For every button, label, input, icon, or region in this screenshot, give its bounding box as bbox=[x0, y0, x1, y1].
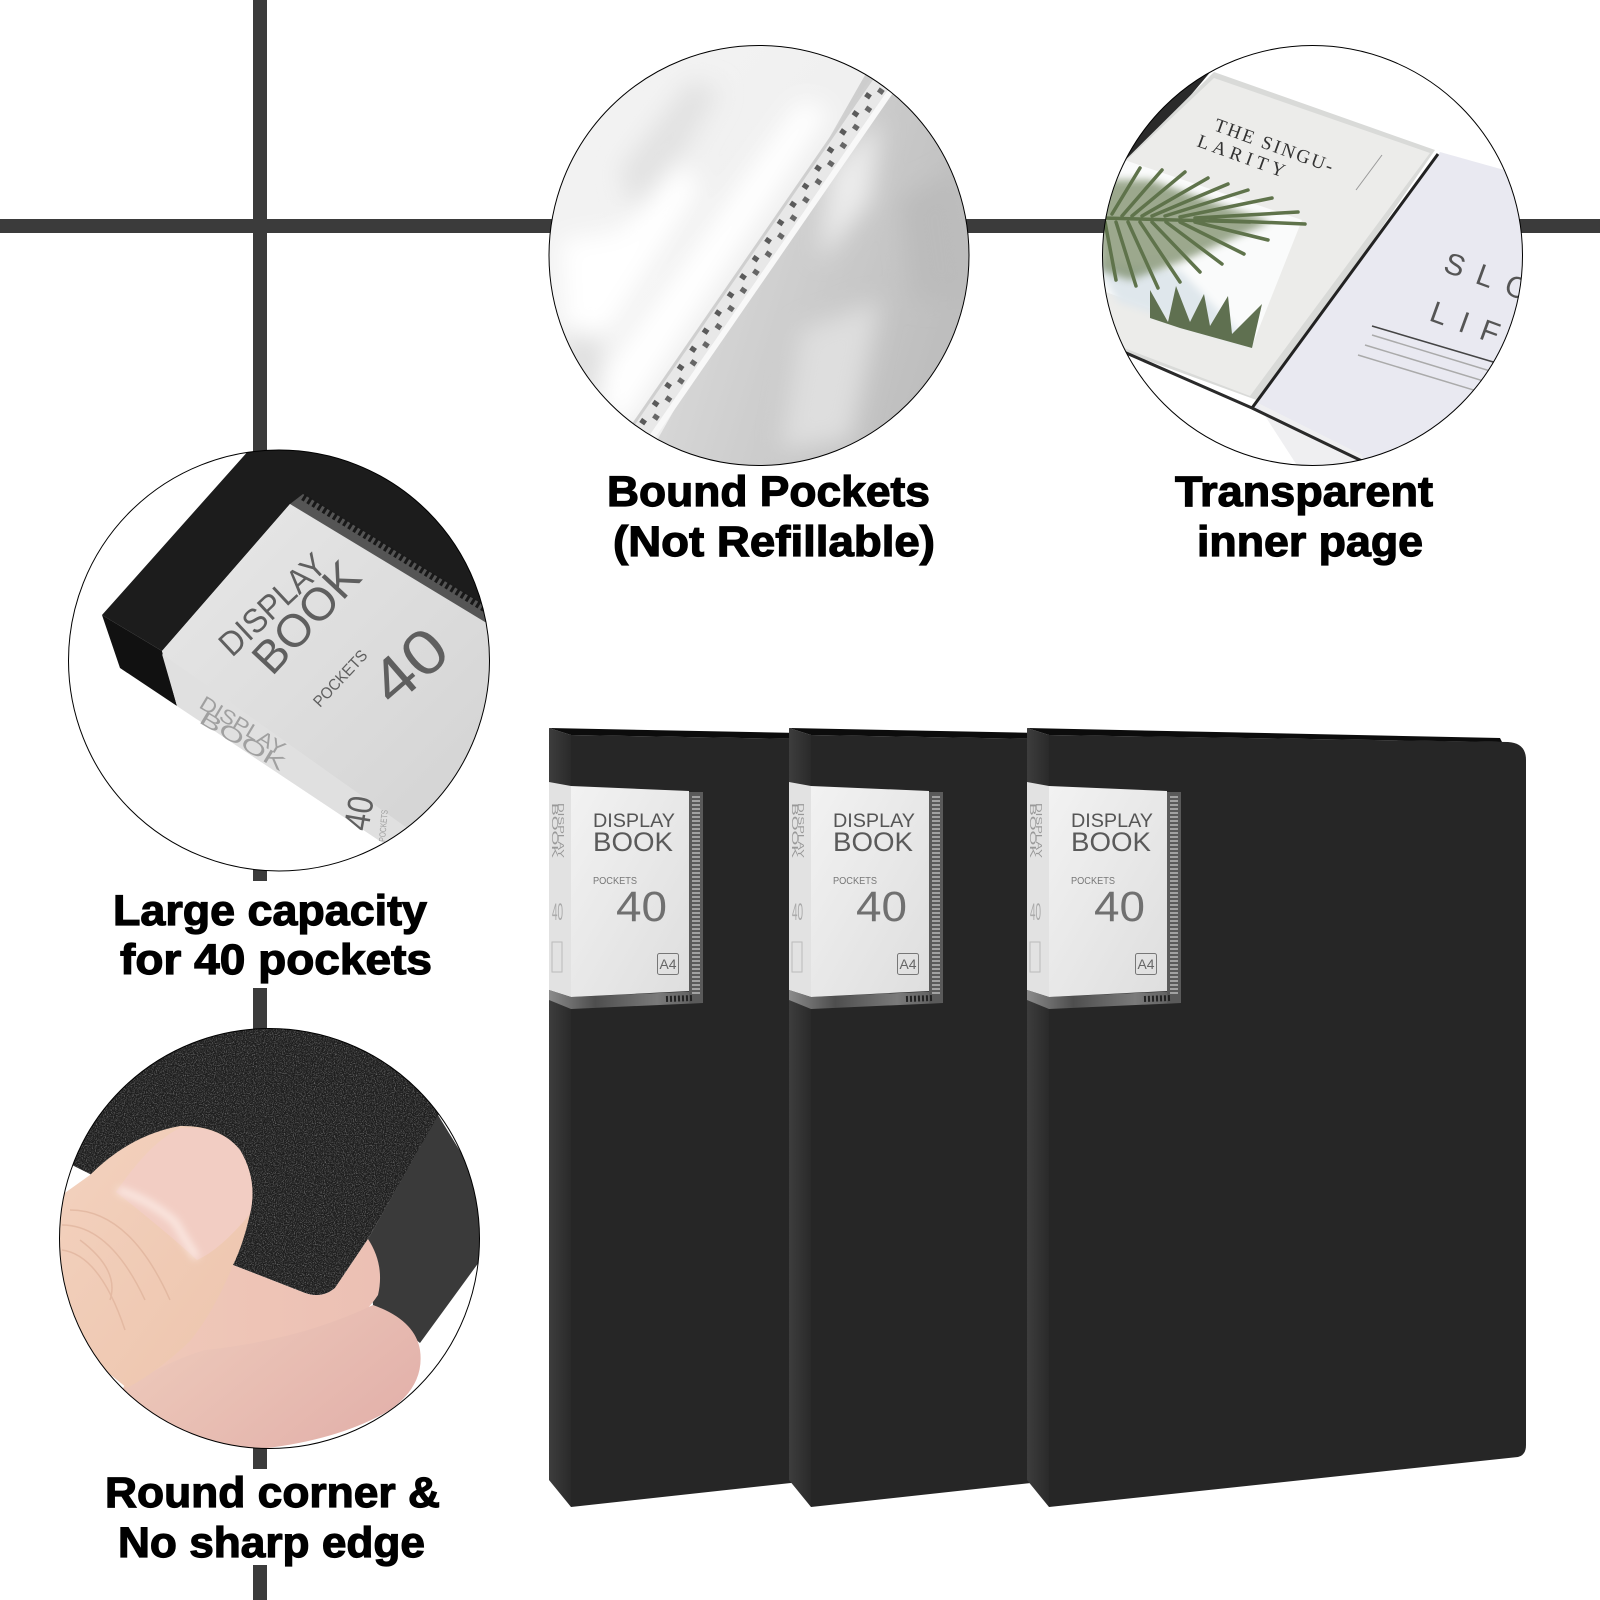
top edge bbox=[549, 728, 800, 739]
caption: bound pockets: Bound Pockets bbox=[607, 468, 930, 516]
product: second display book bbox=[789, 728, 1040, 1507]
photo: open display book with two pages: LIF bbox=[1426, 296, 1517, 356]
cover label: DISPLAY bbox=[833, 811, 915, 832]
caption: transparent inner page: inner page bbox=[1197, 518, 1423, 566]
cover label: 40 bbox=[616, 883, 667, 931]
photo: angled view of display book: POCKETS bbox=[310, 647, 371, 711]
cover label bbox=[549, 782, 703, 1009]
photo: angled view of display book: BOOK bbox=[195, 707, 290, 776]
right page text: SLO bbox=[1440, 247, 1547, 312]
caption: bound pockets bbox=[607, 468, 935, 566]
cover label: BOOK bbox=[593, 827, 673, 857]
photo: open display book with two pages: LARITY bbox=[1194, 131, 1288, 182]
cover label: BOOK bbox=[1071, 827, 1151, 857]
cover label: 40 bbox=[792, 899, 803, 926]
cover label: BOOK bbox=[1028, 803, 1037, 860]
circle outline bbox=[60, 1028, 480, 1448]
cover text: DISPLAY bbox=[212, 546, 334, 664]
cover label: DISPLAY bbox=[1071, 811, 1153, 832]
caption: transparent inner page: Transparent bbox=[1175, 468, 1433, 516]
circle outline bbox=[68, 450, 490, 871]
spine bbox=[1027, 728, 1049, 1507]
cover label: DISPLAY bbox=[593, 811, 675, 832]
cover bbox=[571, 735, 800, 1507]
photo: open display book with two pages bbox=[1103, 72, 1522, 465]
caption: transparent inner page bbox=[1175, 468, 1433, 566]
cover label: POCKETS bbox=[593, 876, 637, 887]
photo: clear pockets with perforated binding seam bbox=[540, 40, 980, 470]
cover label: BOOK bbox=[833, 827, 913, 857]
panel: transparent inner page bbox=[1102, 45, 1523, 466]
top edge bbox=[1027, 728, 1502, 742]
circle outline bbox=[1102, 46, 1522, 466]
cover label: 40 bbox=[856, 883, 907, 931]
photo: angled view of display book: BOOK bbox=[241, 550, 371, 684]
caption: round corner: Round corner & bbox=[105, 1469, 440, 1517]
caption: large capacity: for 40 pockets bbox=[120, 936, 432, 984]
caption: round corner: No sharp edge bbox=[118, 1519, 425, 1567]
panel: large capacity bbox=[65, 445, 495, 875]
cover label: 40 bbox=[1030, 899, 1041, 926]
cover label: POCKETS bbox=[833, 876, 877, 887]
spine text: DISPLAY bbox=[195, 692, 289, 761]
cover label: POCKETS bbox=[1071, 876, 1115, 887]
photo: angled view of display book bbox=[102, 450, 489, 870]
cover label: BOOK bbox=[550, 803, 559, 860]
photo: angled view of display book: 40 bbox=[357, 614, 463, 719]
cover label: DISPLAY bbox=[556, 803, 565, 859]
cover label: DISPLAY bbox=[796, 803, 805, 859]
cover label: BOOK bbox=[790, 803, 799, 860]
photo: angled view of display book: 40 bbox=[336, 793, 382, 833]
cover label: 40 bbox=[1094, 883, 1145, 931]
photo: fingers holding textured rounded corner bbox=[55, 1020, 490, 1455]
circle outline bbox=[549, 46, 969, 466]
caption: bound pockets: (Not Refillable) bbox=[613, 518, 935, 566]
cover bbox=[811, 735, 1040, 1507]
spine bbox=[789, 728, 811, 1507]
cover label: 40 bbox=[552, 899, 563, 926]
cover label bbox=[1027, 782, 1181, 1009]
panel: bound pockets bbox=[540, 40, 980, 470]
caption: round corner bbox=[105, 1469, 440, 1567]
panel: round corner bbox=[55, 1020, 490, 1455]
cover label: A4 bbox=[1138, 956, 1155, 972]
product: third display book bbox=[1027, 728, 1526, 1507]
book title text: THE SINGU- bbox=[1211, 115, 1336, 177]
caption: large capacity bbox=[113, 887, 432, 984]
cover label: A4 bbox=[660, 956, 677, 972]
cover label bbox=[789, 782, 943, 1009]
cover bbox=[1049, 735, 1526, 1507]
cover label: A4 bbox=[900, 956, 917, 972]
spine bbox=[549, 728, 571, 1507]
product: first display book bbox=[549, 728, 800, 1507]
photo: angled view of display book: POCKETS bbox=[377, 809, 390, 842]
cover label: DISPLAY bbox=[1034, 803, 1043, 859]
top edge bbox=[789, 728, 1040, 739]
caption: large capacity: Large capacity bbox=[113, 887, 427, 935]
